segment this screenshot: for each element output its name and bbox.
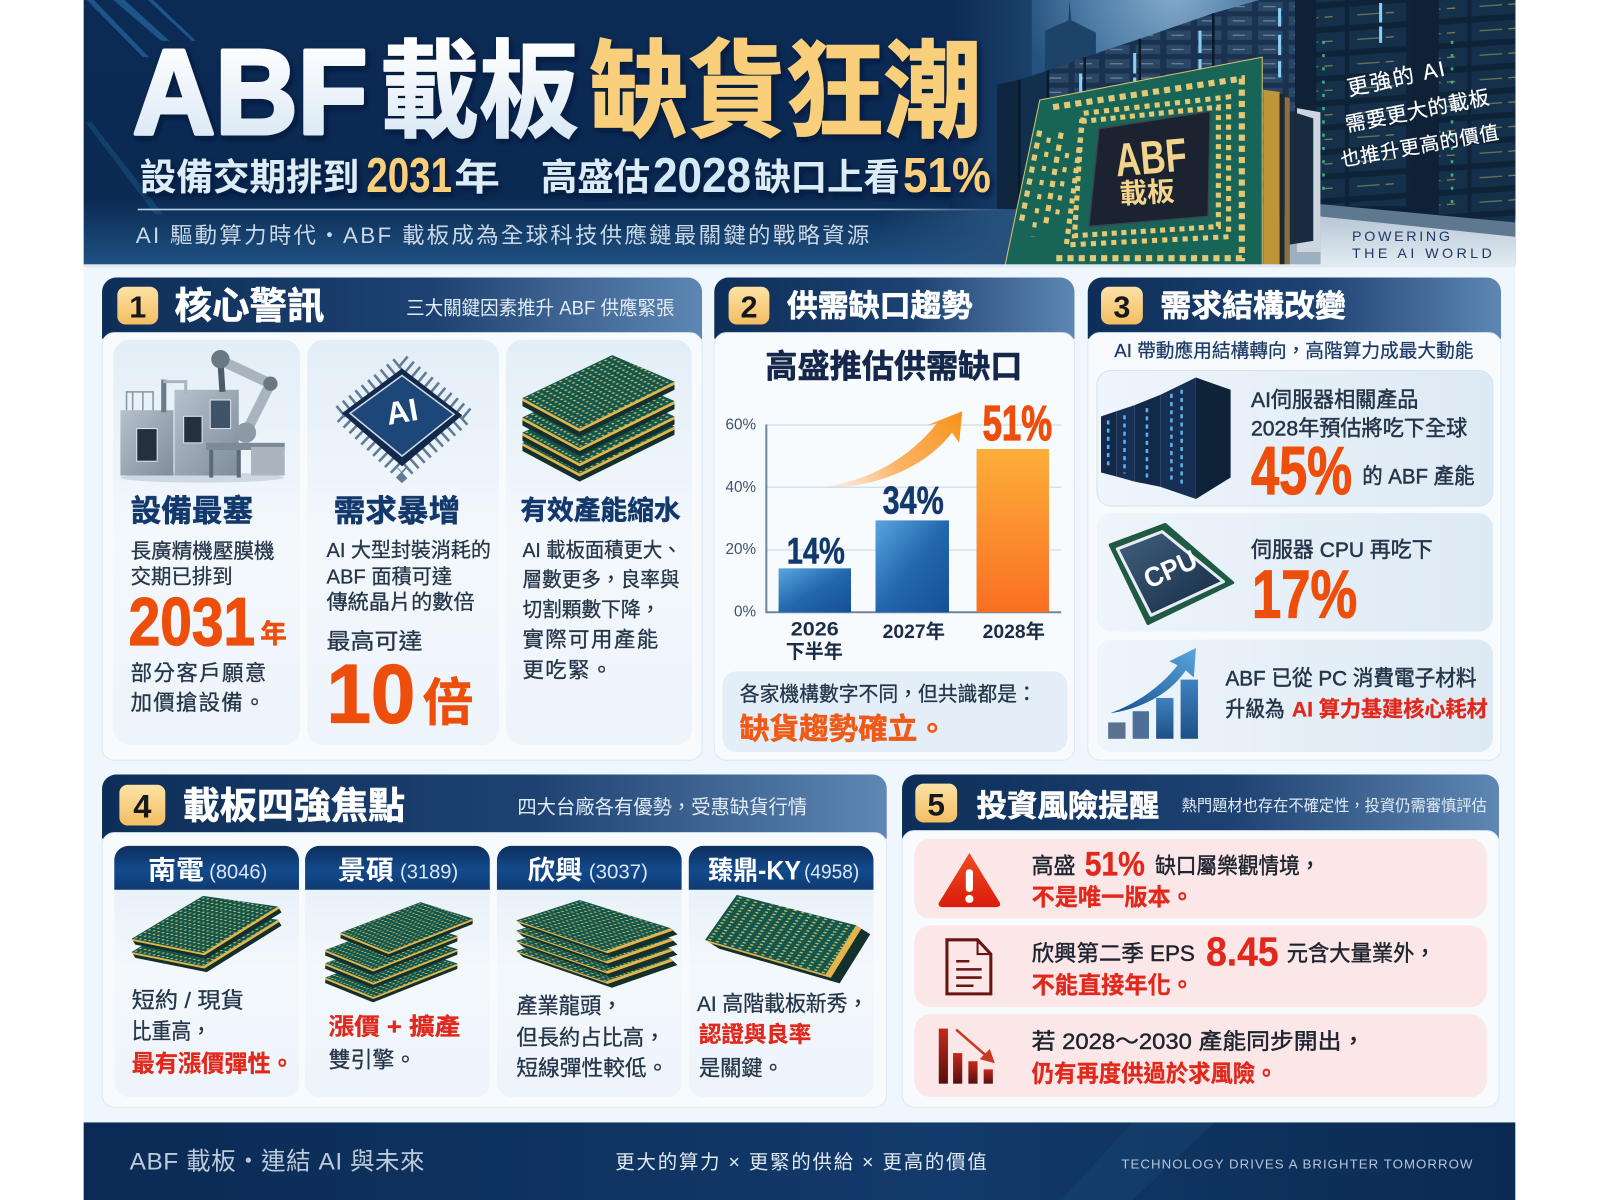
card: AI servers: 2028年預估將吃下全球 — [1251, 417, 1467, 441]
footer — [84, 1122, 1515, 1200]
main title: 載板 — [380, 34, 579, 152]
card: Nan Ya PCB: 南電 — [148, 856, 204, 886]
card: AI servers: AI伺服器相關產品 — [1251, 388, 1418, 412]
icon: AI chip — [339, 361, 467, 473]
card: equipment: 年 — [260, 619, 287, 649]
card: demand: 10 — [327, 646, 415, 740]
subtitle: 缺口上看 — [754, 157, 900, 198]
icon: CPU — [1110, 524, 1233, 623]
header banner — [84, 0, 1515, 265]
card: equipment — [113, 340, 300, 745]
subtitle: 年 — [454, 157, 500, 198]
card: equipment: 部分客戶願意 — [131, 662, 266, 686]
badge 4: 4 — [133, 787, 151, 824]
bar chart: 0% — [734, 603, 757, 620]
icon: CPU: CPU — [1139, 544, 1202, 594]
card: Zhen Ding: 是關鍵。 — [699, 1057, 784, 1081]
card: effective capacity: 實際可用產能 — [522, 628, 658, 652]
panel 5: risk reminders — [902, 774, 1499, 1107]
bar chart: 2027年 — [883, 620, 945, 643]
header floor — [878, 209, 1515, 265]
panel 4 heading: 載板四強焦點 — [183, 785, 405, 826]
icon: substrate — [324, 901, 474, 1004]
rotated slogan: 更強的 AI — [1345, 57, 1447, 101]
main title — [133, 25, 982, 160]
icon: lamination machine — [120, 350, 285, 483]
tagline: AI 驅動算力時代・ABF 載板成為全球科技供應鏈最關鍵的戰略資源 — [136, 223, 869, 248]
card: core material: ABF 已從 PC 消費電子材料 — [1226, 667, 1477, 691]
panel 3 subheading: AI 帶動應用結構轉向，高階算力成最大動能 — [1114, 339, 1474, 361]
card: Unimicron: 短線彈性較低。 — [516, 1057, 668, 1081]
card: server CPU: 17% — [1252, 557, 1357, 632]
footer slogan: 更大的算力 × 更緊的供給 × 更高的價值 — [615, 1151, 987, 1173]
card: equipment: 長廣精機壓膜機 — [131, 540, 274, 563]
card: demand: 需求暴增 — [334, 494, 460, 528]
rotated slogan: 需要更大的載板 — [1344, 86, 1491, 137]
panel 4 subheading: 四大台廠各有優勢，受惠缺貨行情 — [517, 795, 807, 818]
ABF substrate chip — [1005, 57, 1320, 265]
header skyline — [950, 0, 1328, 214]
panel 5 subheading: 熱門題材也存在不確定性，投資仍需審慎評估 — [1182, 797, 1487, 815]
risk row 1: 不是唯一版本。 — [1032, 884, 1194, 910]
card: equipment: 加價搶設備。 — [131, 691, 265, 715]
badge 1: 1 — [129, 290, 146, 324]
icon: document — [947, 940, 991, 994]
card: effective capacity — [506, 340, 692, 745]
risk row 2: 8.45 — [1206, 928, 1279, 974]
card: effective capacity: 更吃緊。 — [522, 659, 612, 683]
panel 1 heading: 核心警訊 — [174, 285, 324, 326]
callout — [722, 671, 1067, 752]
card: Kinsus: (3189) — [400, 862, 458, 884]
badge 4 — [119, 785, 165, 826]
card: Unimicron: 但長約占比高， — [516, 1026, 665, 1050]
icon: substrate — [480, 888, 717, 1000]
badge 3 — [1101, 287, 1143, 324]
main title: 缺貨狂潮 — [590, 34, 982, 152]
card: Unimicron: 產業龍頭， — [516, 993, 622, 1018]
chip die: ABF — [1113, 128, 1189, 186]
icon: warning — [939, 853, 1000, 907]
header server racks — [997, 0, 1515, 237]
powering slogan — [1352, 229, 1492, 262]
badge 1 — [117, 287, 158, 324]
card: Zhen Ding: 認證與良率 — [699, 1021, 811, 1047]
card: Kinsus — [305, 846, 490, 1097]
card: effective capacity: AI 載板面積更大、 — [522, 539, 682, 562]
badge 2: 2 — [740, 290, 757, 324]
panel 3 heading: 需求結構改變 — [1160, 289, 1346, 323]
icon: growth chart — [1108, 648, 1198, 739]
risk row 2: 元含大量業外， — [1287, 941, 1436, 966]
subtitle: 2028 — [653, 149, 751, 203]
card: demand: 最高可達 — [327, 629, 422, 654]
badge 2 — [729, 287, 769, 324]
card: Zhen Ding: 臻鼎-KY — [708, 856, 801, 886]
chip die — [1089, 111, 1210, 227]
card: Unimicron — [480, 846, 717, 1097]
icon: server racks — [1101, 378, 1231, 499]
card: AI servers — [1097, 370, 1493, 509]
panel 2 heading: 供需缺口趨勢 — [787, 289, 973, 323]
panel 2: supply gap — [714, 278, 1074, 760]
footer tagline: TECHNOLOGY DRIVES A BRIGHTER TOMORROW — [1121, 1156, 1473, 1171]
badge 5 — [915, 784, 957, 822]
risk row 1: 高盛 — [1032, 853, 1076, 878]
card: demand: 倍 — [422, 674, 473, 731]
risk row 2 — [914, 926, 1487, 1007]
icon: falling chart — [939, 1029, 995, 1084]
panel 3: demand structure — [1088, 278, 1501, 760]
panel 1 subheading: 三大關鍵因素推升 ABF 供應緊張 — [406, 296, 674, 319]
card: Nan Ya PCB — [112, 846, 303, 1097]
risk row 3 — [914, 1014, 1487, 1097]
card: effective capacity: 有效產能縮水 — [520, 495, 681, 525]
card: AI servers: 的 ABF 產能 — [1362, 465, 1474, 489]
risk row 1: 缺口屬樂觀情境， — [1155, 853, 1320, 878]
card: Nan Ya PCB: 最有漲價彈性。 — [132, 1050, 294, 1076]
icon: substrate stack — [522, 355, 674, 482]
icon: substrate — [631, 893, 952, 986]
card: Zhen Ding: (4958) — [804, 862, 859, 884]
card: Unimicron: 欣興 — [528, 856, 583, 886]
rotated slogan — [1339, 57, 1500, 171]
panel 1: core alert — [102, 278, 702, 760]
rotated slogan: 也推升更高的價值 — [1339, 122, 1500, 171]
card: Zhen Ding — [631, 846, 952, 1097]
callout: 各家機構數字不同，但共識都是： — [740, 683, 1037, 706]
risk row 3: 仍有再度供過於求風險。 — [1032, 1060, 1278, 1087]
card: Kinsus: 雙引擎。 — [329, 1047, 416, 1072]
subtitle: 51% — [903, 149, 991, 203]
bar chart: 14% — [787, 530, 845, 571]
card: Nan Ya PCB: (8046) — [209, 862, 267, 884]
card: core material — [1097, 640, 1493, 752]
card: demand: 傳統晶片的數倍 — [327, 591, 474, 614]
card: core material: AI 算力基建核心耗材 — [1292, 697, 1488, 721]
card: Kinsus: 漲價 + 擴產 — [329, 1013, 460, 1040]
card: effective capacity: 切割顆數下降， — [522, 598, 660, 621]
bar chart: 60% — [725, 417, 757, 434]
bar chart — [725, 397, 1061, 663]
chip die: 載板 — [1119, 176, 1175, 209]
card: equipment: 交期已排到 — [131, 566, 233, 589]
card: core material: 升級為 — [1226, 697, 1285, 721]
card: server CPU — [1097, 513, 1493, 632]
card: Nan Ya PCB: 短約 / 現貨 — [132, 988, 244, 1013]
card: demand — [307, 340, 499, 745]
powering slogan: THE AI WORLD — [1352, 246, 1492, 262]
decorative diagonal streaks — [86, 0, 196, 214]
panel 5 heading: 投資風險提醒 — [977, 789, 1159, 823]
risk row 2: 欣興第二季 EPS — [1032, 941, 1195, 966]
badge 3: 3 — [1113, 290, 1130, 324]
bar chart: 20% — [725, 541, 757, 558]
card: effective capacity: 層數更多，良率與 — [522, 569, 680, 592]
icon: substrate — [112, 887, 303, 980]
card: Nan Ya PCB: 比重高， — [132, 1019, 211, 1044]
callout: 缺貨趨勢確立。 — [740, 713, 947, 746]
risk row 1 — [914, 839, 1487, 918]
subtitle: 高盛估 — [541, 157, 650, 198]
risk row 1: 51% — [1085, 846, 1145, 884]
subtitle: 設備交期排到 — [140, 157, 359, 198]
card: equipment: 設備最塞 — [131, 493, 253, 528]
panel 4: big four — [102, 774, 952, 1107]
arrow: upward trend — [813, 411, 962, 488]
icon: AI chip: AI — [383, 391, 421, 432]
card: Kinsus: 景碩 — [338, 856, 394, 886]
bar chart: 2026 — [791, 619, 839, 641]
chart heading: 高盛推估供需缺口 — [765, 348, 1022, 385]
bar chart: 下半年 — [786, 640, 843, 663]
risk row 2: 不能直接年化。 — [1032, 972, 1194, 998]
card: demand: AI 大型封裝消耗的 — [327, 539, 491, 562]
card: AI servers: 45% — [1251, 434, 1352, 509]
subtitle: 2031 — [366, 149, 452, 203]
card: Unimicron: (3037) — [589, 862, 648, 884]
bar chart: 2028年 — [983, 620, 1045, 643]
badge 5: 5 — [927, 786, 945, 822]
footer brand: ABF 載板・連結 AI 與未來 — [130, 1147, 424, 1175]
card: server CPU: 伺服器 CPU 再吃下 — [1251, 538, 1433, 562]
bar chart: 34% — [883, 479, 944, 522]
subtitle — [140, 149, 991, 203]
main title: ABF — [133, 25, 367, 160]
card: equipment: 2031 — [129, 585, 255, 660]
powering slogan: POWERING — [1352, 229, 1450, 245]
risk row 3: 若 2028～2030 產能同步開出， — [1032, 1029, 1365, 1054]
card: Zhen Ding: AI 高階載板新秀， — [697, 992, 868, 1016]
bar chart: 40% — [725, 479, 757, 496]
bar chart: 51% — [983, 397, 1052, 451]
card: demand: ABF 面積可達 — [327, 566, 452, 589]
